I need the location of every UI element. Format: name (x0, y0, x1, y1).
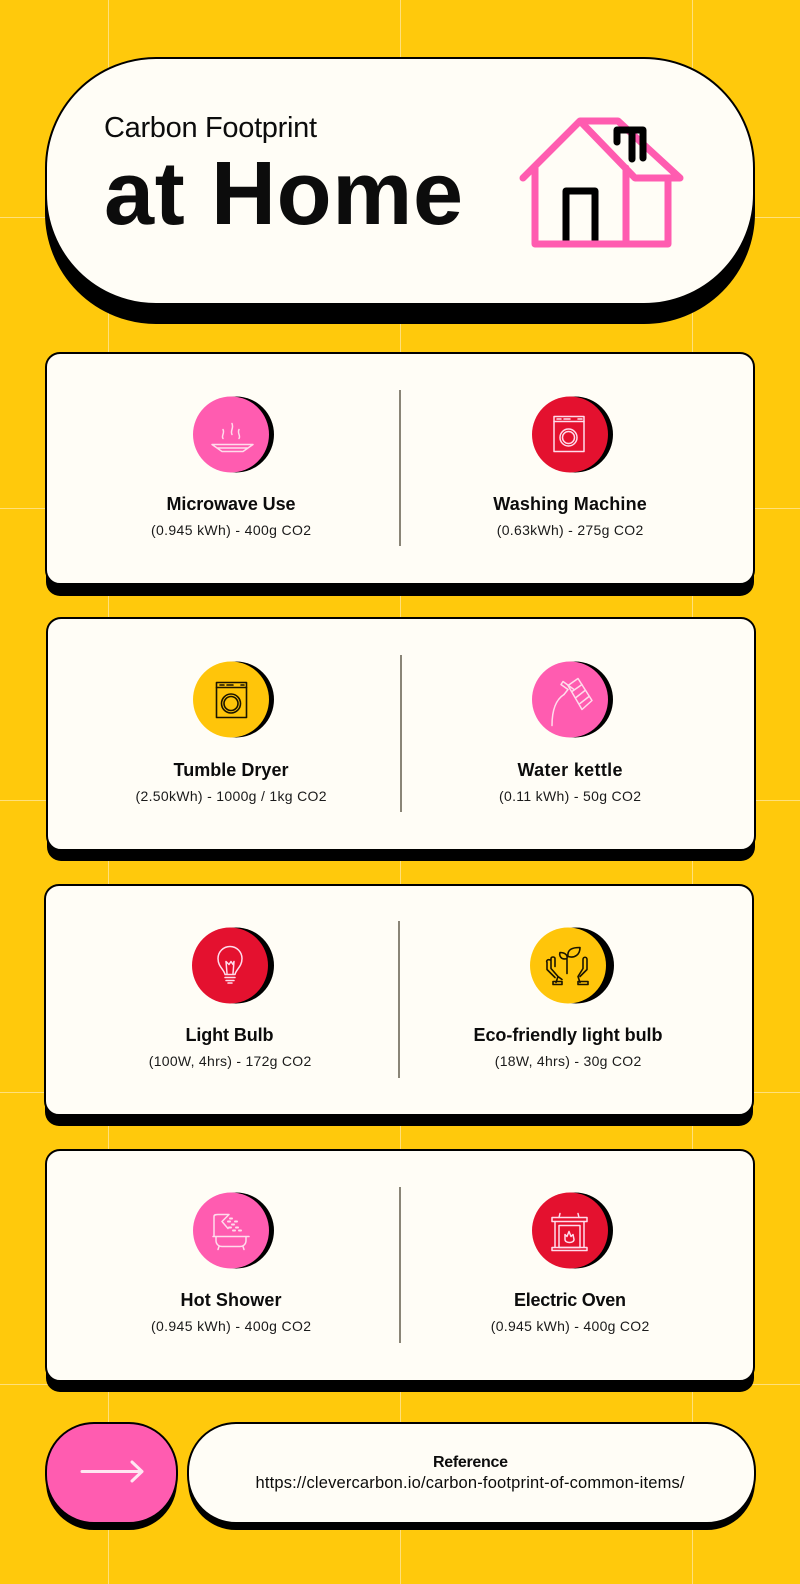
item: light bulb (149, 928, 311, 1069)
item: eco-friendly light bulb (474, 928, 662, 1069)
item: eco-friendly light bulb: Eco-friendly light bulb (474, 1025, 662, 1045)
panel: tumble dryer and water kettle (47, 618, 755, 861)
item: water kettle: Water kettle (518, 760, 622, 780)
item: microwave use: Microwave Use (166, 494, 296, 514)
reference text: https://clevercarbon.io/carbon-footprint-of-common-items/ (256, 1474, 685, 1492)
icon: washing machine (554, 416, 584, 452)
item: light bulb: (100W, 4hrs) - 172g CO2 (149, 1053, 311, 1069)
title: at Home (104, 144, 463, 244)
icon: house (523, 121, 680, 244)
icon: shower and bathtub (213, 1214, 249, 1250)
item: tumble dryer (136, 662, 327, 804)
item: microwave use (151, 396, 311, 538)
item: tumble dryer: Tumble Dryer (174, 760, 288, 780)
item: washing machine (493, 396, 647, 538)
icon: hands holding plant (547, 948, 588, 984)
icon: arrow (82, 1462, 142, 1481)
item: eco-friendly light bulb: (18W, 4hrs) - 30g CO2 (495, 1053, 641, 1069)
item: washing machine: Washing Machine (493, 494, 647, 514)
item: electric oven: (0.945 kWh) - 400g CO2 (491, 1318, 649, 1334)
item: hot shower (151, 1192, 311, 1334)
item: hot shower: (0.945 kWh) - 400g CO2 (151, 1318, 311, 1334)
title: Carbon Footprint (104, 112, 317, 144)
item: water kettle: (0.11 kWh) - 50g CO2 (499, 788, 641, 804)
header panel (46, 58, 754, 323)
reference panel (188, 1423, 755, 1530)
panel: hot shower and electric oven (46, 1150, 754, 1392)
panel: microwave and washing machine (46, 353, 754, 596)
icon: water kettle (552, 678, 592, 726)
item: hot shower: Hot Shower (180, 1290, 282, 1310)
item: electric oven (491, 1192, 649, 1334)
arrow button (46, 1423, 177, 1530)
item: tumble dryer: (2.50kWh) - 1000g / 1kg CO2 (136, 788, 327, 804)
item: washing machine: (0.63kWh) - 275g CO2 (497, 522, 643, 538)
item: light bulb: Light Bulb (186, 1025, 274, 1045)
icon: tumble dryer (216, 682, 246, 718)
icon: oven (552, 1214, 587, 1250)
item: water kettle (499, 662, 641, 804)
icon: plate with steam (212, 424, 253, 452)
item: electric oven: Electric Oven (514, 1290, 626, 1310)
reference text: Reference (433, 1454, 508, 1471)
item: microwave use: (0.945 kWh) - 400g CO2 (151, 522, 311, 538)
icon: light bulb (218, 946, 242, 983)
panel: light bulb and eco-friendly bulb (45, 885, 753, 1126)
reference text (256, 1454, 685, 1492)
